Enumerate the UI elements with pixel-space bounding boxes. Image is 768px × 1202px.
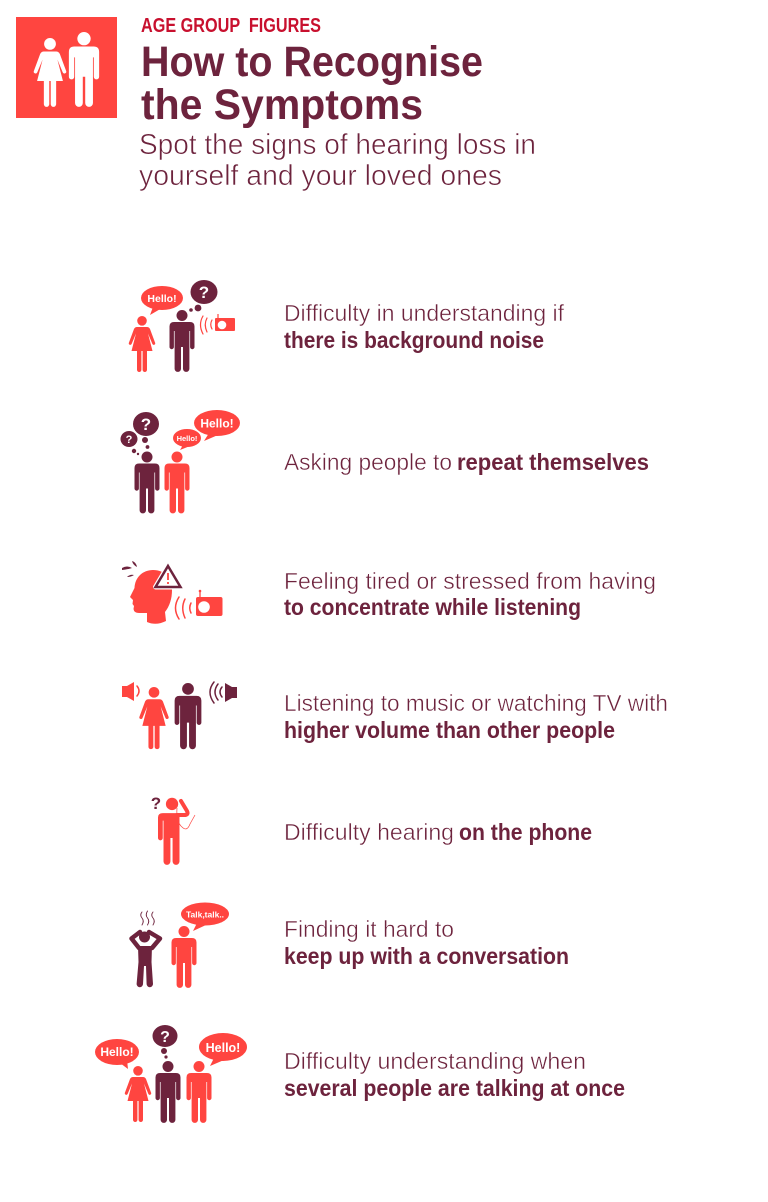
title bbox=[141, 38, 483, 129]
icon: two men with speech bubbles: Hello! bbox=[177, 434, 197, 443]
text: Difficulty in understanding if bbox=[284, 300, 565, 326]
text: Finding it hard to bbox=[284, 916, 454, 942]
text bbox=[284, 449, 649, 475]
icon: two men with speech bubbles bbox=[120, 410, 240, 513]
category label: AGE GROUP FIGURES bbox=[141, 15, 321, 37]
icon: stressed man and talking man bbox=[132, 902, 229, 988]
icon: man on the phone: ? bbox=[151, 794, 161, 813]
icon: three people with bubbles bbox=[95, 1025, 247, 1123]
text: to concentrate while listening bbox=[284, 594, 581, 620]
text: Difficulty hearing bbox=[284, 819, 454, 845]
title: the Symptoms bbox=[141, 81, 423, 129]
icon: two men with speech bubbles: ? bbox=[141, 415, 151, 434]
symptom 7: several people talking bbox=[95, 1025, 625, 1123]
subtitle: yourself and your loved ones bbox=[139, 160, 502, 192]
subtitle: Spot the signs of hearing loss in bbox=[139, 129, 536, 161]
symptom 5: on the phone bbox=[151, 794, 592, 865]
icon: head with warning and radio bbox=[122, 561, 222, 624]
subtitle bbox=[139, 129, 536, 192]
icon: man on the phone bbox=[151, 794, 195, 865]
symptom 3: tired or stressed bbox=[122, 561, 656, 624]
text: repeat themselves bbox=[457, 449, 649, 475]
icon: woman and man with radio: Hello! bbox=[147, 293, 177, 305]
icon: woman and man with speakers bbox=[122, 682, 237, 749]
icon: woman and man with radio: ? bbox=[199, 283, 209, 302]
text bbox=[284, 916, 569, 969]
text bbox=[284, 819, 592, 845]
text: Listening to music or watching TV with bbox=[284, 690, 668, 716]
text: on the phone bbox=[459, 819, 592, 845]
icon: two men with speech bubbles: Hello! bbox=[200, 416, 234, 430]
title: How to Recognise bbox=[141, 38, 483, 86]
text: Asking people to bbox=[284, 449, 452, 475]
symptom 6: keep up with a conversation bbox=[132, 902, 569, 988]
text: several people are talking at once bbox=[284, 1075, 625, 1101]
text: higher volume than other people bbox=[284, 717, 615, 743]
text: Difficulty understanding when bbox=[284, 1048, 586, 1074]
icon: woman and man with radio bbox=[129, 280, 235, 372]
symptom 4: higher volume bbox=[122, 682, 668, 749]
symptom 1: background noise bbox=[129, 280, 565, 372]
icon: stressed man and talking man: Talk,talk.. bbox=[186, 910, 224, 920]
header icon: man and woman bbox=[16, 17, 117, 118]
text: keep up with a conversation bbox=[284, 943, 569, 969]
text bbox=[284, 568, 656, 620]
icon: three people with bubbles: ? bbox=[160, 1029, 170, 1046]
text bbox=[284, 300, 565, 353]
text bbox=[284, 1048, 625, 1101]
icon: three people with bubbles: Hello! bbox=[100, 1045, 134, 1059]
icon: three people with bubbles: Hello! bbox=[206, 1041, 240, 1055]
text: Feeling tired or stressed from having bbox=[284, 568, 656, 594]
text: there is background noise bbox=[284, 327, 544, 353]
symptom 2: repeat themselves bbox=[120, 410, 649, 513]
icon: two men with speech bubbles: ? bbox=[126, 434, 133, 446]
text bbox=[284, 690, 668, 743]
